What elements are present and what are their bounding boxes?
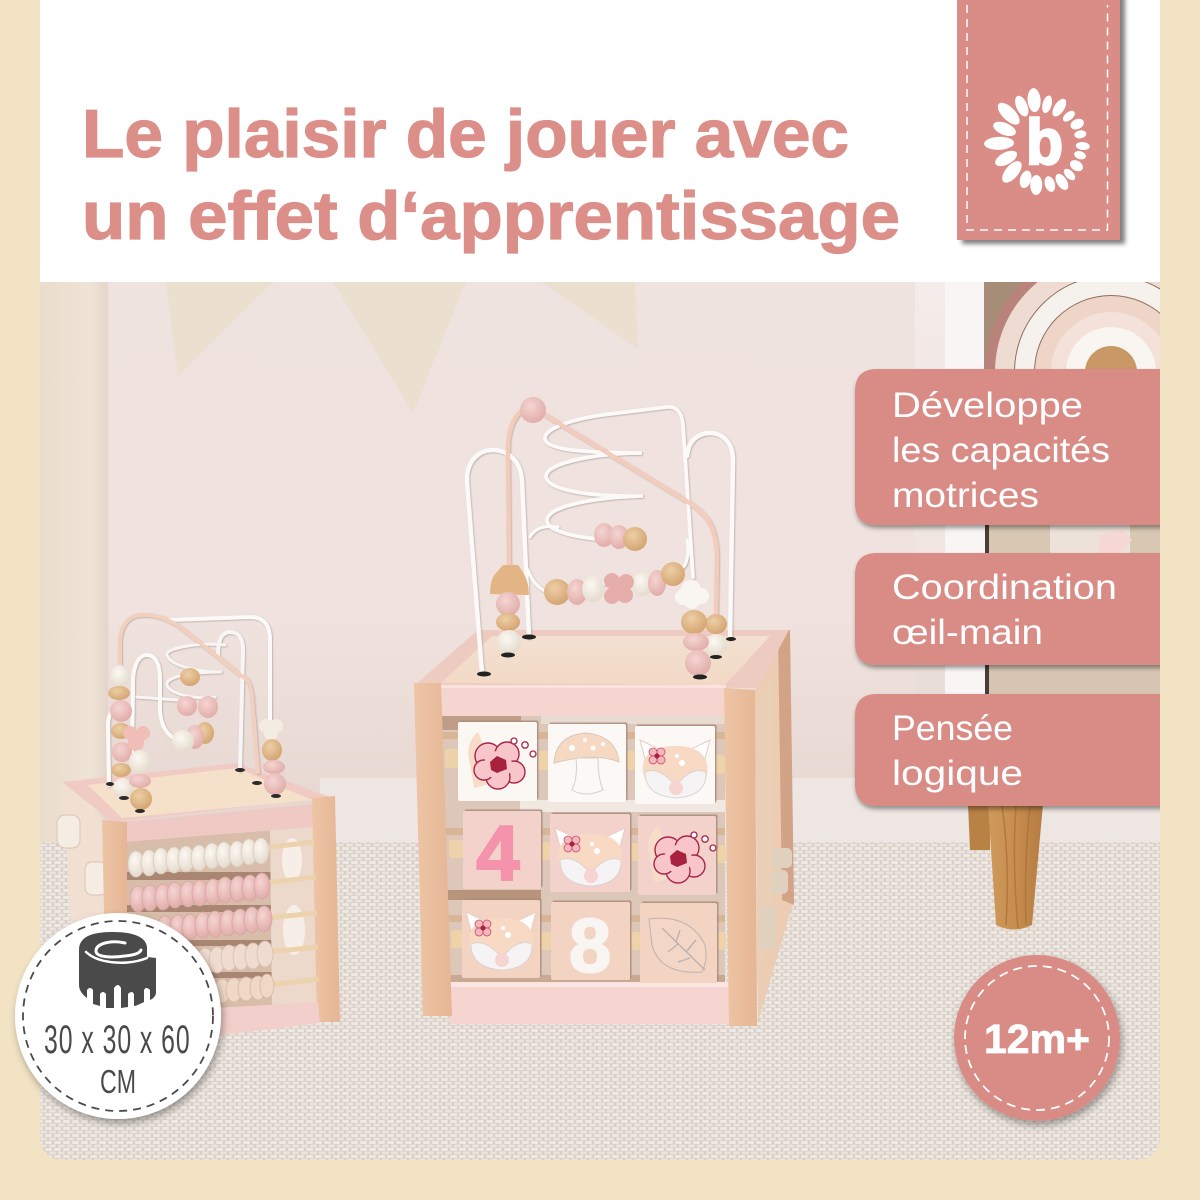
- side knobs: [57, 815, 107, 895]
- rug: [40, 842, 1160, 1162]
- header panel: [40, 0, 1160, 282]
- benefit pill: motor skills: Développe: [892, 385, 1083, 425]
- bunting flags: [166, 282, 638, 413]
- block: fox peach: [462, 900, 540, 978]
- block: number 8: 8: [569, 904, 611, 989]
- block: flower: [458, 722, 537, 801]
- top face: [62, 763, 330, 822]
- side knobs: [760, 848, 792, 950]
- bottom rail: [215, 1002, 320, 1036]
- title: [82, 96, 900, 254]
- size badge: [15, 913, 221, 1119]
- benefit pills: [855, 369, 1170, 806]
- benefit pill: coordination: [855, 553, 1170, 665]
- block: number 4: 4: [476, 809, 520, 897]
- cube left side: [66, 818, 104, 924]
- logo: petals: [984, 88, 1090, 195]
- block: fox white: [635, 726, 715, 804]
- furniture legs: [968, 804, 1043, 930]
- icon: measuring tape: [79, 932, 156, 1008]
- benefit pill: logic: logique: [892, 753, 1023, 793]
- curtain: [40, 282, 108, 867]
- abacus beads: [128, 838, 274, 1003]
- benefit pill: motor skills: [855, 369, 1170, 525]
- benefit pill: motor skills: les capacités: [892, 430, 1110, 470]
- lifestyle photo scene: [40, 246, 1200, 1162]
- block: flower pink: [638, 816, 716, 895]
- front top rail: [124, 804, 314, 842]
- block: fox pink: [550, 814, 630, 892]
- large activity cube: [414, 397, 794, 1026]
- back rods: [441, 732, 725, 922]
- age badge: 12m+: [984, 1016, 1090, 1062]
- left post: [414, 683, 452, 1016]
- benefit pill: motor skills: motrices: [892, 475, 1039, 515]
- wire maze: [108, 615, 270, 785]
- logo: letter b: b: [1026, 106, 1063, 178]
- wall: [108, 282, 915, 822]
- brand tag with logo: [957, 0, 1120, 240]
- abacus rods: [262, 842, 319, 985]
- shelf contents: [984, 282, 1160, 694]
- wire maze: [467, 407, 733, 673]
- right post: [724, 688, 757, 1026]
- block: leaf: [640, 903, 717, 983]
- wire beads: [106, 665, 286, 813]
- benefit pill: coordination: œil-main: [892, 612, 1043, 652]
- posts: [102, 820, 127, 914]
- shelf white frame: [945, 282, 985, 694]
- front top rail: [442, 688, 724, 716]
- block: mushroom: [548, 724, 626, 802]
- small activity cube: [57, 615, 340, 1036]
- bottom rail: [450, 987, 729, 1024]
- interior: [127, 830, 272, 1008]
- right side face: [755, 630, 794, 1022]
- wire beads: [477, 397, 736, 680]
- dowels: [445, 749, 726, 950]
- baseboard: [320, 778, 1160, 844]
- title: Le plaisir de jouer avec: [82, 96, 849, 172]
- interior: [441, 716, 725, 988]
- unit text: CM: [100, 1063, 136, 1100]
- benefit pill: coordination: Coordination: [892, 567, 1117, 607]
- top face: [415, 630, 789, 688]
- age badge: [954, 955, 1120, 1121]
- block: number 8: [551, 902, 630, 989]
- block: number 4: [463, 809, 541, 897]
- size text: 30 x 30 x 60: [44, 1018, 190, 1063]
- benefit pill: logic: Pensée: [892, 708, 1013, 748]
- wall right section: [915, 282, 945, 369]
- benefit pill: logic: [855, 694, 1170, 806]
- title: un effet d‘apprentissage: [82, 178, 900, 254]
